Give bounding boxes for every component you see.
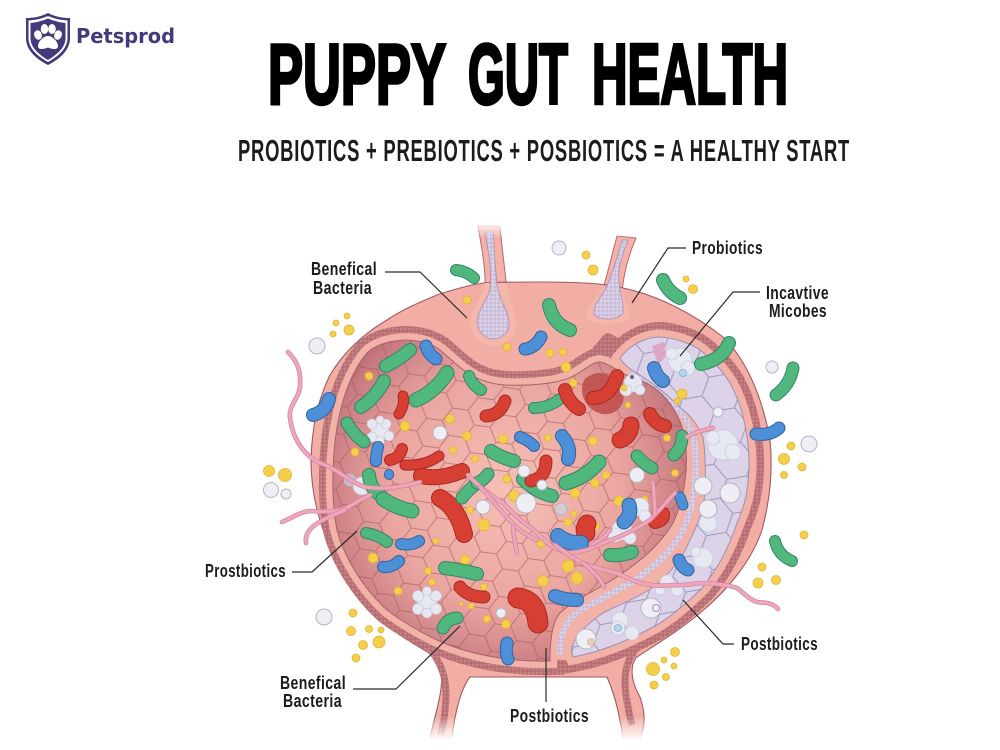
callout: Probiotics: Probiotics (692, 238, 763, 258)
white spheres inside lumen (433, 426, 644, 618)
tube bulb: upper left (470, 232, 516, 346)
title: PUPPY (268, 27, 446, 122)
gut body outer wall (311, 282, 771, 738)
yellow and white particles outside (264, 241, 817, 689)
title: GUT (468, 27, 568, 122)
callout: Benefical Bacteria (bottom): Benefical (280, 673, 346, 693)
icon: white microbe clusters (344, 416, 651, 618)
tube bulb: upper right (586, 240, 630, 324)
callout: Benefical Bacteria (bottom) (280, 626, 460, 711)
callout: Incavtive Micobes: Micobes (769, 301, 827, 321)
callout: Postbiotics (right): Postbiotics (741, 634, 818, 654)
title (268, 27, 788, 122)
logo: Petsprod (26, 13, 175, 65)
icon: paw shield (26, 13, 70, 65)
callout: Prostbiotics (205, 531, 357, 581)
chamber clouds: inactive microbes (576, 348, 741, 649)
callout: Incavtive Micobes: Incavtive (766, 283, 829, 303)
callout: Prostbiotics: Prostbiotics (205, 561, 286, 581)
bacteria in lumen and wall (313, 280, 729, 659)
pink strands (282, 352, 778, 609)
callout: Benefical Bacteria (top): Benefical (311, 259, 377, 279)
callout: Postbiotics (right) (683, 600, 818, 654)
bacteria outside the gut (456, 270, 793, 561)
yellow nutrient dots (351, 296, 687, 628)
callout: Incavtive Micobes (680, 283, 829, 356)
callout: Benefical Bacteria (top) (311, 259, 467, 318)
title: HEALTH (592, 27, 788, 122)
callout: Benefical Bacteria (bottom): Bacteria (283, 691, 342, 711)
tube necks above the body (478, 226, 636, 292)
callout: Benefical Bacteria (top): Bacteria (313, 278, 372, 298)
callout: Postbiotics (bottom) (510, 648, 589, 726)
callout: Probiotics (632, 238, 763, 303)
logo wordmark: Petsprod (76, 24, 175, 48)
wall: speckled muscle layers (333, 333, 749, 735)
panel: intestinal lumen (333, 340, 686, 661)
panel: lilac chamber (572, 337, 749, 657)
callout: Postbiotics (bottom): Postbiotics (510, 706, 589, 726)
gut cross-section diagram (264, 222, 817, 740)
